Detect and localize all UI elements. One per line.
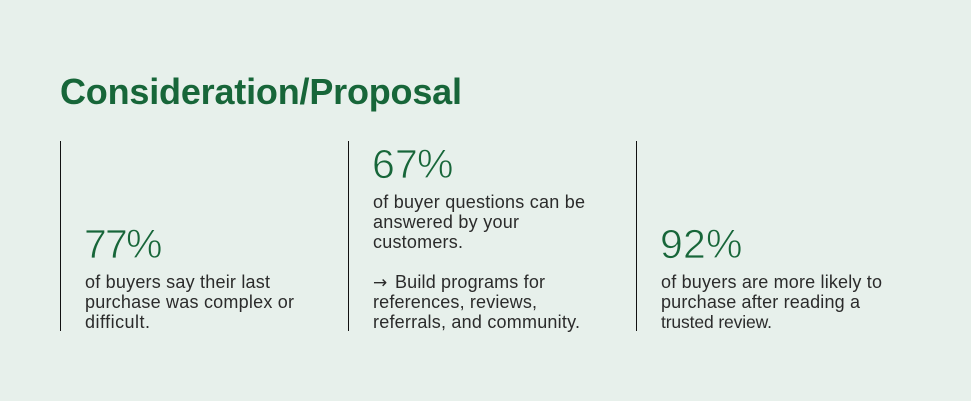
text block: 92% description [661,272,882,332]
stat number: 67%: 67% [372,141,453,187]
text block: recommendation: → [373,273,387,293]
text block: 67% description: of buyer questions can be [373,192,585,212]
text block: 67% description: answered by your [373,212,519,232]
text block: 77% description: purchase was complex or [85,292,294,312]
text block: 67% description [373,192,585,252]
text block: 77% description: difficult. [85,312,150,332]
panel: 77% stat [60,141,294,332]
title: Consideration/Proposal [60,71,462,112]
text block: 92% description: purchase after reading a [661,292,861,312]
text block: recommendation: referrals, and community. [373,312,580,332]
text block: recommendation: references, reviews, [373,292,537,312]
text block: 92% description: of buyers are more likely to [661,272,882,292]
text block: recommendation: Build programs for [395,272,545,292]
text block: 67% description: customers. [373,232,463,252]
stat number: 92%: 92% [660,221,742,267]
panel: 92% stat [636,141,882,332]
stat number: 77%: 77% [84,221,162,267]
panel: 67% stat [348,141,585,332]
text block: 77% description: of buyers say their last [85,272,270,292]
text block: 92% description: trusted review. [661,312,772,332]
text block: 77% description [85,272,294,332]
text block: recommendation [373,272,580,332]
